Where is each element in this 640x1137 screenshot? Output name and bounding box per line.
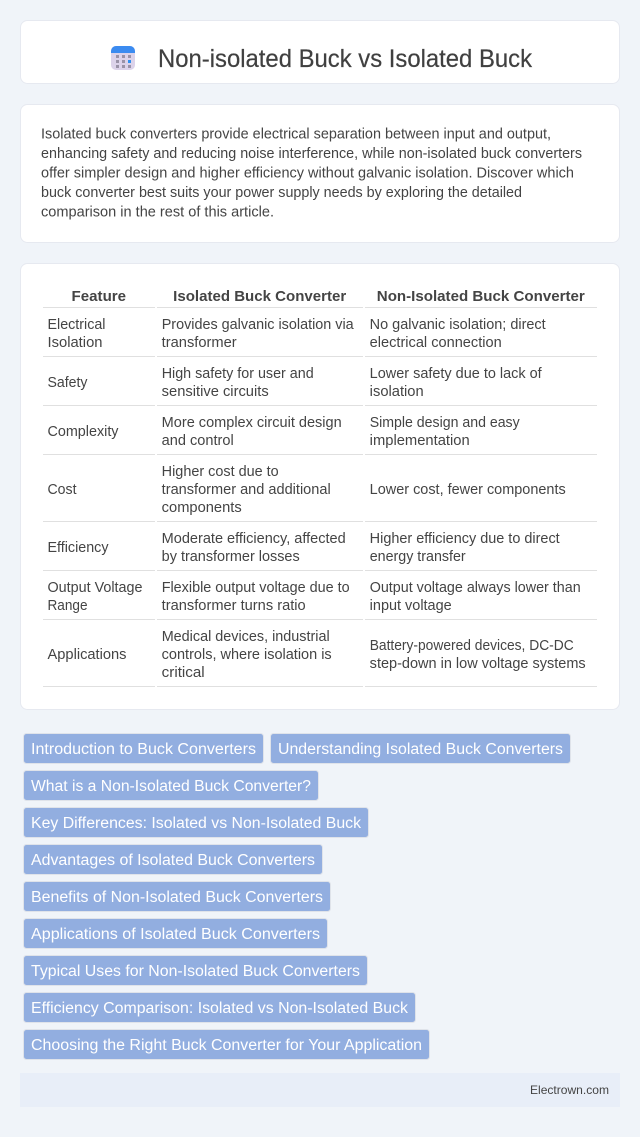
tag <box>24 770 318 800</box>
row: applications: Battery-powered devices, DC-DC <box>370 638 574 654</box>
row: applications: Medical devices, industrial <box>162 629 330 645</box>
tag <box>24 844 322 874</box>
tag <box>24 734 264 764</box>
tag: Choosing the Right Buck Converter for Your Application <box>31 1037 422 1054</box>
panel: intro text: buck converter best suits your power supply needs by exploring the detailed <box>41 185 522 201</box>
row: cost: components <box>162 500 242 516</box>
header panel <box>20 20 620 84</box>
row: cost: Lower cost, fewer components <box>370 482 566 498</box>
row: complexity: More complex circuit design <box>162 415 342 431</box>
row: applications: Applications <box>48 647 126 663</box>
row: electrical isolation: Provides galvanic isolation via <box>162 317 354 333</box>
tag: Benefits of Non-Isolated Buck Converters <box>31 889 323 906</box>
row: output voltage range: Output voltage always lower than <box>370 580 581 596</box>
panel: comparison table <box>20 264 620 710</box>
panel: intro text: offer simpler design and higher efficiency without galvanic isolation. Discover which <box>41 166 574 182</box>
panel: intro text: Isolated buck converters provide electrical separation between input and output, <box>41 126 551 142</box>
tag <box>24 992 416 1022</box>
tag <box>24 956 368 986</box>
row: safety: isolation <box>370 384 424 400</box>
row: efficiency <box>48 531 560 565</box>
tag: Understanding Isolated Buck Converters <box>278 741 563 758</box>
title: Non-isolated Buck vs Isolated Buck <box>158 45 532 73</box>
row: electrical isolation: electrical connection <box>370 335 502 351</box>
tag: Advantages of Isolated Buck Converters <box>31 852 315 869</box>
row: cost: Cost <box>48 482 76 498</box>
row: complexity: implementation <box>370 433 470 449</box>
table header: Non-Isolated Buck Converter <box>377 288 585 305</box>
row: complexity: Simple design and easy <box>370 415 520 431</box>
row: applications: critical <box>162 665 205 681</box>
row: output voltage range: Flexible output voltage due to <box>162 580 350 596</box>
row: cost: transformer and additional <box>162 482 331 498</box>
row: output voltage range: Range <box>48 598 88 614</box>
row: efficiency: Higher efficiency due to direct <box>370 531 560 547</box>
tag: Key Differences: Isolated vs Non-Isolated Buck <box>31 815 361 832</box>
row: safety <box>48 366 543 400</box>
row: complexity: Complexity <box>48 424 119 440</box>
row: electrical isolation: Electrical <box>48 317 106 333</box>
row: safety: Safety <box>48 375 88 391</box>
row: safety: Lower safety due to lack of <box>370 366 543 382</box>
tag <box>24 918 328 948</box>
row: applications: step-down in low voltage systems <box>370 656 586 672</box>
panel: intro text <box>20 104 620 242</box>
row: electrical isolation: No galvanic isolation; direct <box>370 317 546 333</box>
row: efficiency: Efficiency <box>48 540 109 556</box>
panel: intro text: enhancing safety and reducing noise interference, while non-isolated buck converters <box>41 146 582 162</box>
tag: Applications of Isolated Buck Converters <box>31 926 320 943</box>
footer: Electrown.com <box>530 1083 609 1097</box>
tag: Introduction to Buck Converters <box>31 741 256 758</box>
row: safety: High safety for user and <box>162 366 314 382</box>
row: electrical isolation: Isolation <box>48 335 102 351</box>
row: applications <box>48 629 586 681</box>
row: efficiency: Moderate efficiency, affected <box>162 531 346 547</box>
row: cost: Higher cost due to <box>162 464 279 480</box>
tag: What is a Non-Isolated Buck Converter? <box>31 778 311 795</box>
row: complexity: and control <box>162 433 234 449</box>
tag: Efficiency Comparison: Isolated vs Non-Isolated Buck <box>31 1000 408 1017</box>
row: cost <box>48 464 566 516</box>
row: output voltage range: Output Voltage <box>48 580 142 596</box>
tag <box>24 808 368 838</box>
row: electrical isolation: transformer <box>162 335 237 351</box>
table header: Feature <box>72 288 126 305</box>
row: efficiency: by transformer losses <box>162 549 300 565</box>
row: electrical isolation <box>48 317 546 351</box>
footer <box>20 1073 620 1107</box>
row: complexity <box>48 415 520 449</box>
row: output voltage range: input voltage <box>370 598 452 614</box>
row: applications: controls, where isolation is <box>162 647 332 663</box>
panel: intro text: comparison in the rest of this article. <box>41 204 274 220</box>
tag <box>24 1030 430 1060</box>
tag: Typical Uses for Non-Isolated Buck Converters <box>31 963 360 980</box>
tag <box>270 734 570 764</box>
row: output voltage range: transformer turns ratio <box>162 598 306 614</box>
tag <box>24 882 330 912</box>
row: output voltage range <box>48 580 581 614</box>
icon: calendar app <box>111 46 135 70</box>
tag list: table of contents <box>24 734 570 1060</box>
table header <box>72 288 585 305</box>
row: safety: sensitive circuits <box>162 384 269 400</box>
row: efficiency: energy transfer <box>370 549 466 565</box>
table header: Isolated Buck Converter <box>173 288 346 305</box>
